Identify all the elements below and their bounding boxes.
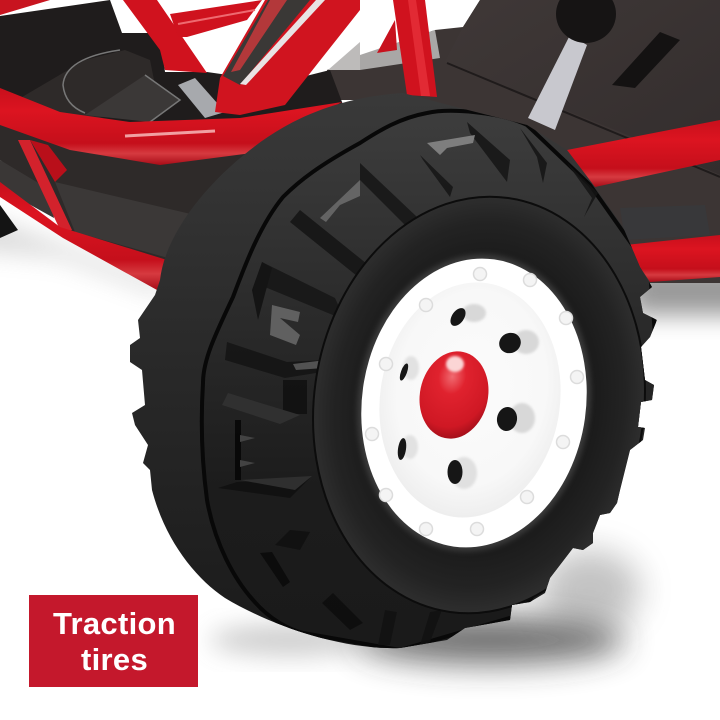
tread block shading — [218, 122, 598, 645]
tread ring — [202, 111, 660, 650]
red frame tubes — [0, 0, 720, 290]
tire — [120, 85, 671, 655]
badge: Traction tires — [29, 595, 198, 687]
white hub — [338, 239, 610, 567]
tire outer band — [120, 85, 665, 655]
steering post — [215, 0, 680, 130]
rim studs — [366, 268, 584, 536]
kart chassis — [0, 0, 720, 283]
badge: Traction tires: Traction — [53, 606, 176, 640]
bolt holes — [397, 304, 539, 489]
sidewall ring — [312, 196, 646, 614]
floor shadows — [0, 210, 720, 664]
red center cap — [412, 345, 496, 445]
badge: Traction tires: tires — [81, 642, 148, 676]
